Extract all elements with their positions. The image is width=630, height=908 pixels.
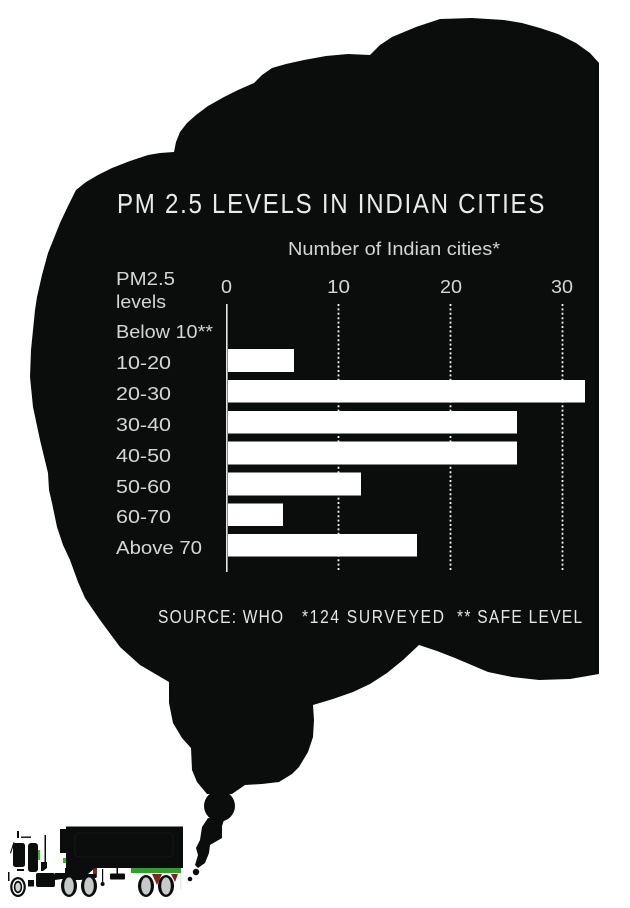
trailer — [60, 826, 183, 889]
category labels: 60-70 — [116, 507, 171, 527]
wheels — [10, 875, 174, 897]
source note — [158, 607, 582, 627]
axis tick labels: 30 — [551, 277, 573, 297]
axis tick labels: 10 — [327, 277, 350, 297]
source note: ** SAFE LEVEL — [457, 607, 582, 627]
category labels: Below 10** — [116, 322, 213, 342]
source note: SOURCE: WHO — [158, 607, 283, 627]
row header: levels — [116, 292, 166, 312]
category labels: Above 70 — [116, 538, 202, 558]
bar chart — [226, 304, 585, 572]
axis tick labels: 20 — [440, 277, 462, 297]
icon: truck — [8, 826, 183, 897]
axis title: Number of Indian cities* — [288, 239, 500, 259]
category labels: 10-20 — [116, 353, 171, 373]
soot particles — [188, 869, 199, 881]
category labels: 30-40 — [116, 415, 171, 435]
category labels: 40-50 — [116, 446, 171, 466]
cab — [8, 831, 96, 887]
axis tick labels — [221, 277, 573, 297]
title: PM 2.5 LEVELS IN INDIAN CITIES — [117, 187, 544, 219]
category labels: 20-30 — [116, 384, 171, 404]
category labels — [116, 322, 213, 558]
category labels: 50-60 — [116, 477, 171, 497]
source note: *124 SURVEYED — [302, 607, 444, 627]
row header: PM2.5 — [116, 269, 175, 289]
row header — [116, 269, 175, 312]
axis tick labels: 0 — [221, 277, 232, 297]
